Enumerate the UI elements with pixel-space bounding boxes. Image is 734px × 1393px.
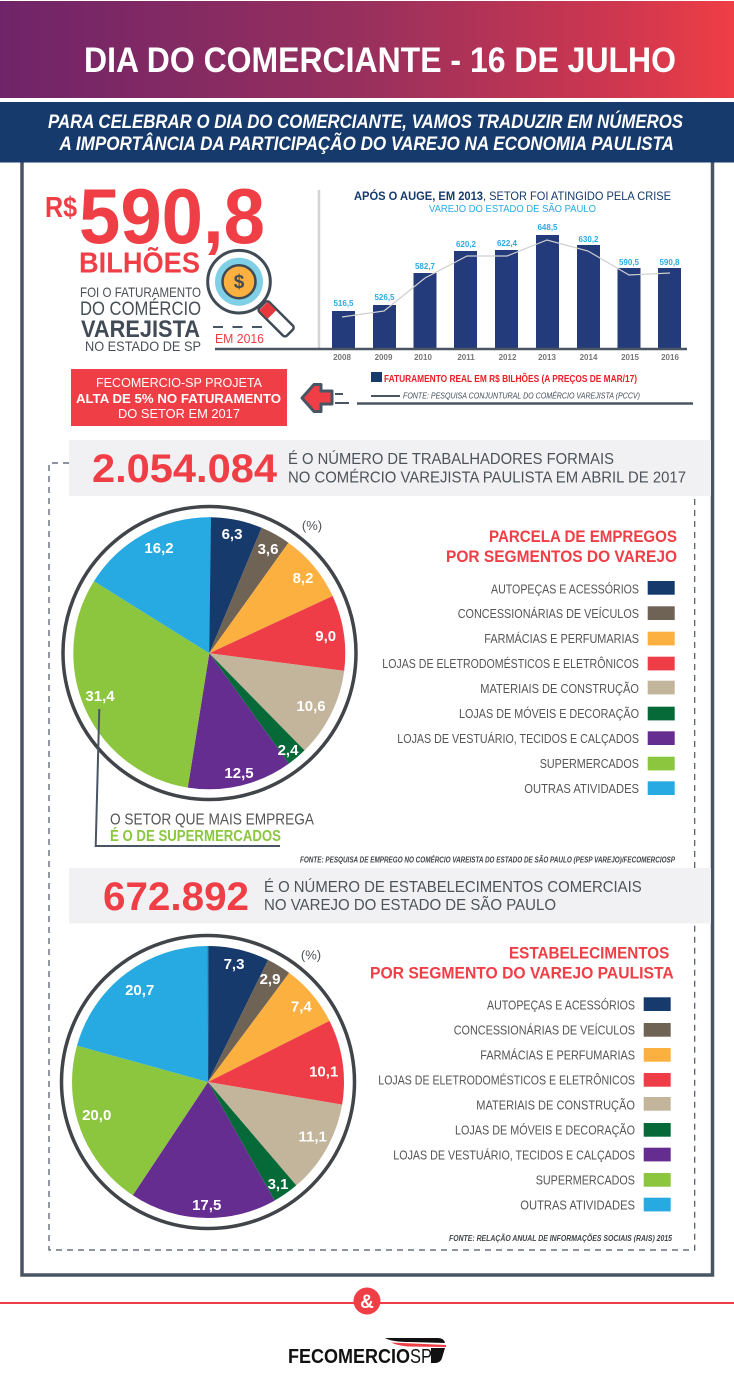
bar values: 590,5 — [619, 258, 640, 267]
pie values: 3,6 — [258, 541, 278, 558]
year labels — [333, 353, 679, 362]
bars — [332, 235, 681, 349]
callout: projeção 2017: ALTA DE 5% NO FATURAMENTO — [76, 391, 281, 406]
pie values: 10,1 — [309, 1063, 338, 1080]
legend: empregos: FARMÁCIAS E PERFUMARIAS — [484, 631, 639, 646]
year labels: 2012 — [499, 353, 517, 362]
callout: projeção 2017: FECOMERCIO-SP PROJETA — [96, 375, 262, 390]
label: em 2016: EM 2016 — [215, 331, 264, 346]
pie values: 16,2 — [144, 540, 174, 557]
bar values: 526,5 — [374, 293, 395, 302]
pie values: 3,1 — [268, 1176, 288, 1193]
text: foi o faturamento do comércio varejista — [80, 284, 201, 354]
legend: estabelecimentos: CONCESSIONÁRIAS DE VEÍCULOS — [454, 1022, 635, 1037]
stat band: estabelecimentos comerciais: 672.892 — [103, 875, 249, 919]
legend: estabelecimentos: MATERIAIS DE CONSTRUÇÃO — [476, 1097, 635, 1112]
footer divider with ampersand badge: & — [360, 1292, 374, 1313]
callout: projeção 2017: DO SETOR EM 2017 — [118, 406, 240, 421]
pie values: 7,4 — [291, 999, 312, 1016]
legend: estabelecimentos: LOJAS DE MÓVEIS E DECORAÇÃO — [455, 1122, 635, 1137]
legend: estabelecimentos: SUPERMERCADOS — [536, 1172, 635, 1187]
pie values: 10,6 — [296, 698, 326, 715]
source note: RAIS: FONTE: RELAÇÃO ANUAL DE INFORMAÇÕES SOCIAIS (RAIS) 2015 — [449, 1234, 672, 1243]
legend heading: estabelecimentos: ESTABELECIMENTOS — [509, 943, 669, 962]
legend: empregos: LOJAS DE ELETRODOMÉSTICOS E ELETRÔNICOS — [382, 656, 639, 671]
legend: estabelecimentos: FARMÁCIAS E PERFUMARIAS — [480, 1047, 635, 1062]
text: foi o faturamento do comércio varejista: DO COMÉRCIO — [80, 299, 201, 320]
pie chart: empregos por segmento: (%) — [302, 518, 322, 533]
stat band: estabelecimentos comerciais: É O NÚMERO DE ESTABELECIMENTOS COMERCIAIS — [264, 877, 642, 896]
logo: Fecomercio SP — [288, 1338, 446, 1368]
legend heading: parcela de empregos — [446, 527, 677, 566]
pie values: 6,3 — [222, 526, 242, 543]
chart legend — [357, 372, 693, 404]
year labels: 2016 — [661, 353, 679, 362]
pie values: 11,1 — [299, 1129, 327, 1146]
callout: setor que mais emprega: O SETOR QUE MAIS EMPREGA — [110, 811, 315, 828]
legend heading: parcela de empregos: PARCELA DE EMPREGOS — [489, 527, 677, 546]
legend: empregos: MATERIAIS DE CONSTRUÇÃO — [480, 681, 639, 696]
pie values: 9,0 — [315, 628, 336, 645]
legend: empregos: SUPERMERCADOS — [540, 756, 639, 771]
pie slices — [140, 1014, 276, 1150]
bar values: 516,5 — [333, 299, 354, 308]
icon: magnifying glass with dollar coin — [208, 250, 295, 338]
axis line — [215, 348, 687, 350]
legend: empregos: OUTRAS ATIVIDADES — [524, 781, 639, 796]
stat band: trabalhadores formais: 2.054.084 — [92, 447, 278, 491]
callout: setor que mais emprega — [96, 709, 315, 846]
chart legend: FONTE: PESQUISA CONJUNTURAL DO COMÉRCIO VAREJISTA (PCCV) — [403, 392, 640, 400]
stat band: trabalhadores formais: É O NÚMERO DE TRABALHADORES FORMAIS — [288, 449, 614, 468]
stat band: trabalhadores formais — [69, 440, 711, 496]
callout: projeção 2017 — [71, 369, 287, 426]
year labels: 2015 — [621, 353, 639, 362]
legend heading: estabelecimentos — [370, 943, 674, 982]
pie values: 2,9 — [260, 971, 280, 988]
legend: estabelecimentos: OUTRAS ATIVIDADES — [520, 1197, 635, 1212]
legend: estabelecimentos: LOJAS DE ELETRODOMÉSTICOS E ELETRÔNICOS — [378, 1072, 635, 1087]
callout: setor que mais emprega: É O DE SUPERMERCADOS — [110, 828, 281, 845]
bar values: 620,2 — [456, 240, 477, 249]
chart title — [354, 188, 671, 215]
logo: Fecomercio SP: FECOMERCIO — [288, 1346, 410, 1368]
chart legend: FATURAMENTO REAL EM R$ BILHÕES (A PREÇOS DE MAR/17) — [384, 372, 637, 385]
text: foi o faturamento do comércio varejista: VAREJISTA — [81, 316, 200, 343]
headline figure: R$ 590,8 bilhões: BILHÕES — [79, 246, 200, 280]
bar values: 582,7 — [415, 262, 436, 271]
legend: estabelecimentos: LOJAS DE VESTUÁRIO, TECIDOS E CALÇADOS — [393, 1147, 635, 1162]
pie chart: estabelecimentos por segmento — [62, 936, 354, 1228]
legend: empregos: LOJAS DE MÓVEIS E DECORAÇÃO — [459, 706, 639, 721]
panel frame — [22, 158, 712, 1275]
pie values: 8,2 — [293, 570, 313, 587]
pie chart: estabelecimentos por segmento: (%) — [301, 947, 321, 962]
footer divider with ampersand badge — [0, 1288, 734, 1314]
year labels: 2008 — [333, 353, 351, 362]
subtitle banner — [0, 102, 734, 162]
pie values: 31,4 — [85, 688, 115, 705]
legend: estabelecimentos: AUTOPEÇAS E ACESSÓRIOS — [487, 997, 635, 1012]
pie values: 7,3 — [224, 956, 244, 973]
subtitle banner: A IMPORTÂNCIA DA PARTICIPAÇÃO DO VAREJO NA ECONOMIA PAULISTA — [59, 133, 674, 155]
bar values — [333, 223, 680, 308]
bar values: 648,5 — [537, 223, 558, 232]
pie values: 12,5 — [224, 765, 254, 782]
chart title: VAREJO DO ESTADO DE SÃO PAULO — [429, 202, 596, 215]
pie values: 20,0 — [82, 1107, 111, 1124]
pie values: 20,7 — [125, 982, 154, 999]
legend: empregos: CONCESSIONÁRIAS DE VEÍCULOS — [458, 606, 639, 621]
chart title: , SETOR FOI ATINGIDO PELA CRISE — [483, 189, 671, 203]
dashed section frame — [49, 463, 695, 1250]
pie chart: empregos por segmento — [63, 506, 356, 800]
icon: magnifying glass with dollar coin: $ — [234, 272, 245, 293]
legend heading: parcela de empregos: POR SEGMENTOS DO VAREJO — [446, 547, 677, 566]
chart title: APÓS O AUGE, EM 2013 — [354, 188, 483, 203]
stat band: estabelecimentos comerciais: NO VAREJO DO ESTADO DE SÃO PAULO — [264, 894, 556, 914]
bar chart: faturamento 2008-2016 — [215, 188, 687, 362]
text: foi o faturamento do comércio varejista: FOI O FATURAMENTO — [80, 284, 201, 300]
pie values: 17,5 — [192, 1197, 221, 1214]
legend heading: estabelecimentos: POR SEGMENTO DO VAREJO PAULISTA — [370, 963, 674, 982]
stat band: estabelecimentos comerciais — [69, 868, 711, 924]
headline figure: R$ 590,8 bilhões: 590,8 — [79, 172, 265, 260]
year labels: 2011 — [457, 353, 475, 362]
arrow pointing to callout — [302, 384, 349, 412]
title banner: DIA DO COMERCIANTE - 16 DE JULHO — [84, 41, 676, 80]
legend: empregos: AUTOPEÇAS E ACESSÓRIOS — [491, 581, 639, 596]
legend: estabelecimentos — [378, 997, 671, 1212]
year labels: 2010 — [414, 353, 432, 362]
pie values: 2,4 — [278, 742, 299, 759]
bar values: 590,8 — [659, 258, 680, 267]
year labels: 2009 — [375, 353, 393, 362]
bar values: 630,2 — [578, 235, 599, 244]
legend: empregos — [382, 581, 675, 796]
trend line — [342, 240, 670, 317]
pie values — [82, 956, 338, 1214]
headline figure: R$ 590,8 bilhões: R$ — [45, 192, 77, 224]
headline figure: R$ 590,8 bilhões — [45, 172, 265, 280]
bar values: 622,4 — [497, 239, 518, 248]
pie values — [85, 526, 336, 782]
stat band: trabalhadores formais: NO COMÉRCIO VAREJISTA PAULISTA EM ABRIL DE 2017 — [288, 467, 686, 486]
logo: Fecomercio SP: SP — [410, 1346, 432, 1368]
year labels: 2013 — [538, 353, 556, 362]
year labels: 2014 — [580, 353, 598, 362]
legend: empregos: LOJAS DE VESTUÁRIO, TECIDOS E CALÇADOS — [397, 731, 639, 746]
title banner — [0, 1, 734, 98]
text: foi o faturamento do comércio varejista: NO ESTADO DE SP — [85, 338, 201, 354]
pie slices — [141, 585, 277, 721]
